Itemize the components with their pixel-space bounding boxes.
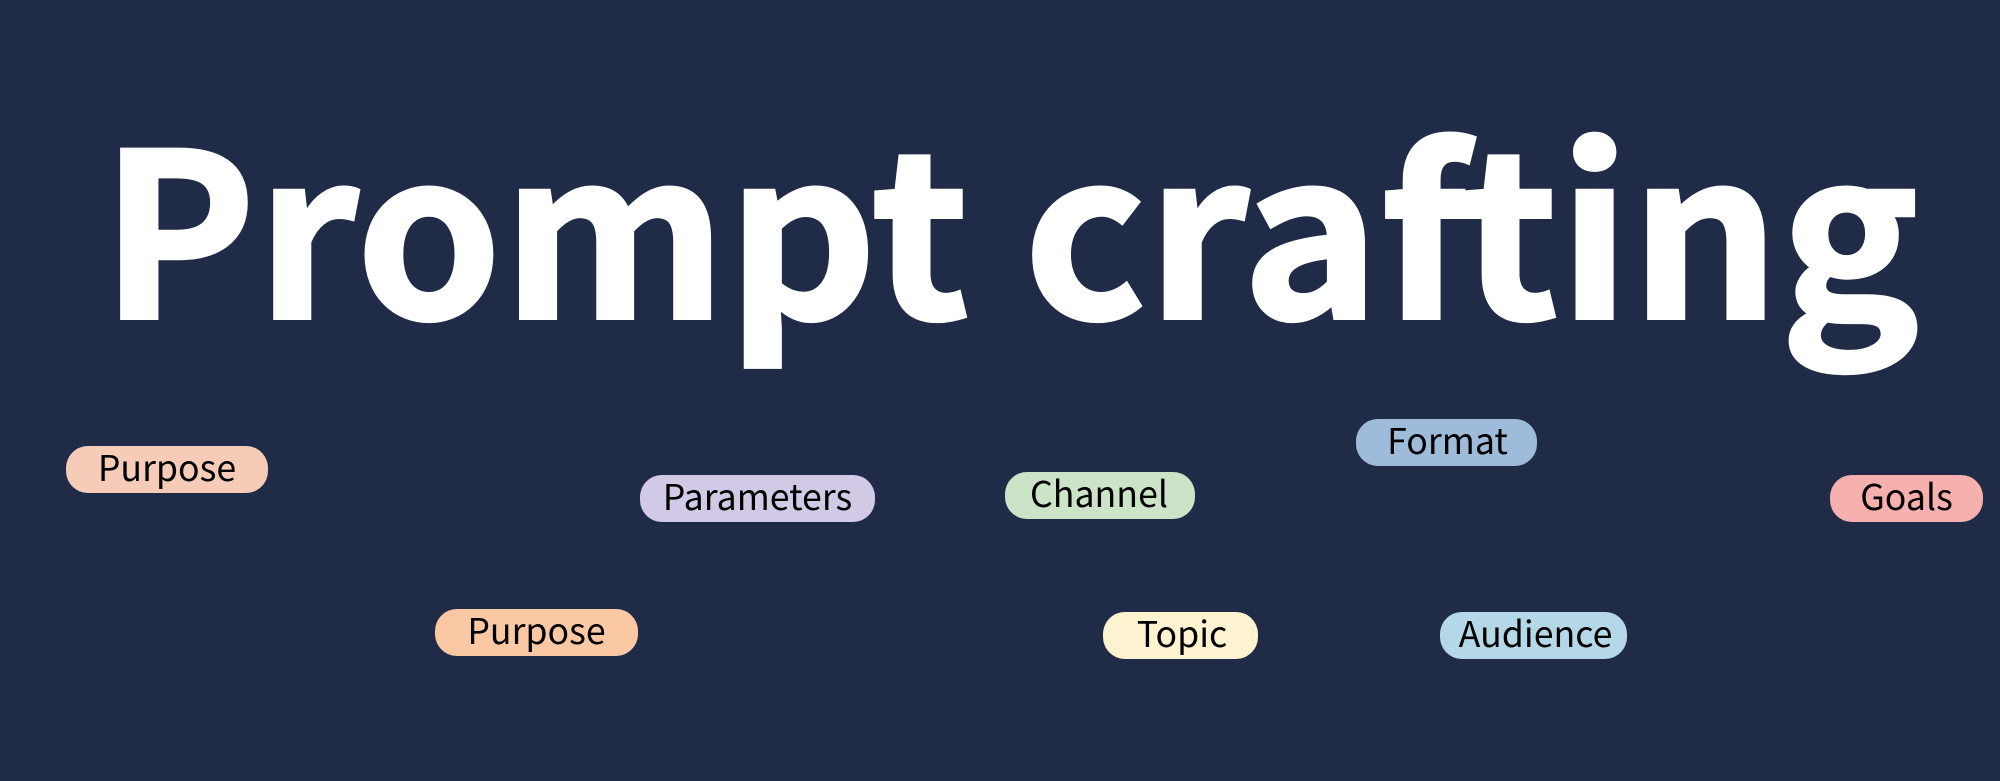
tag: Goals: Goals bbox=[1860, 470, 1953, 521]
tag: Purpose (lower): Purpose bbox=[467, 604, 606, 655]
tag: Topic bbox=[1103, 612, 1258, 659]
tag: Format bbox=[1356, 419, 1537, 466]
tag: Purpose (lower) bbox=[435, 609, 638, 656]
tag: Channel: Channel bbox=[1030, 467, 1168, 518]
tag: Channel bbox=[1005, 472, 1195, 519]
tag: Purpose (left) bbox=[66, 446, 268, 493]
tag: Audience: Audience bbox=[1459, 607, 1612, 658]
tag: Format: Format bbox=[1387, 414, 1508, 465]
tag: Goals bbox=[1830, 475, 1983, 522]
title: Prompt crafting bbox=[101, 54, 1920, 384]
tag: Parameters: Parameters bbox=[663, 470, 852, 521]
tag: Purpose (left): Purpose bbox=[98, 441, 236, 492]
tag: Topic: Topic bbox=[1137, 607, 1227, 658]
